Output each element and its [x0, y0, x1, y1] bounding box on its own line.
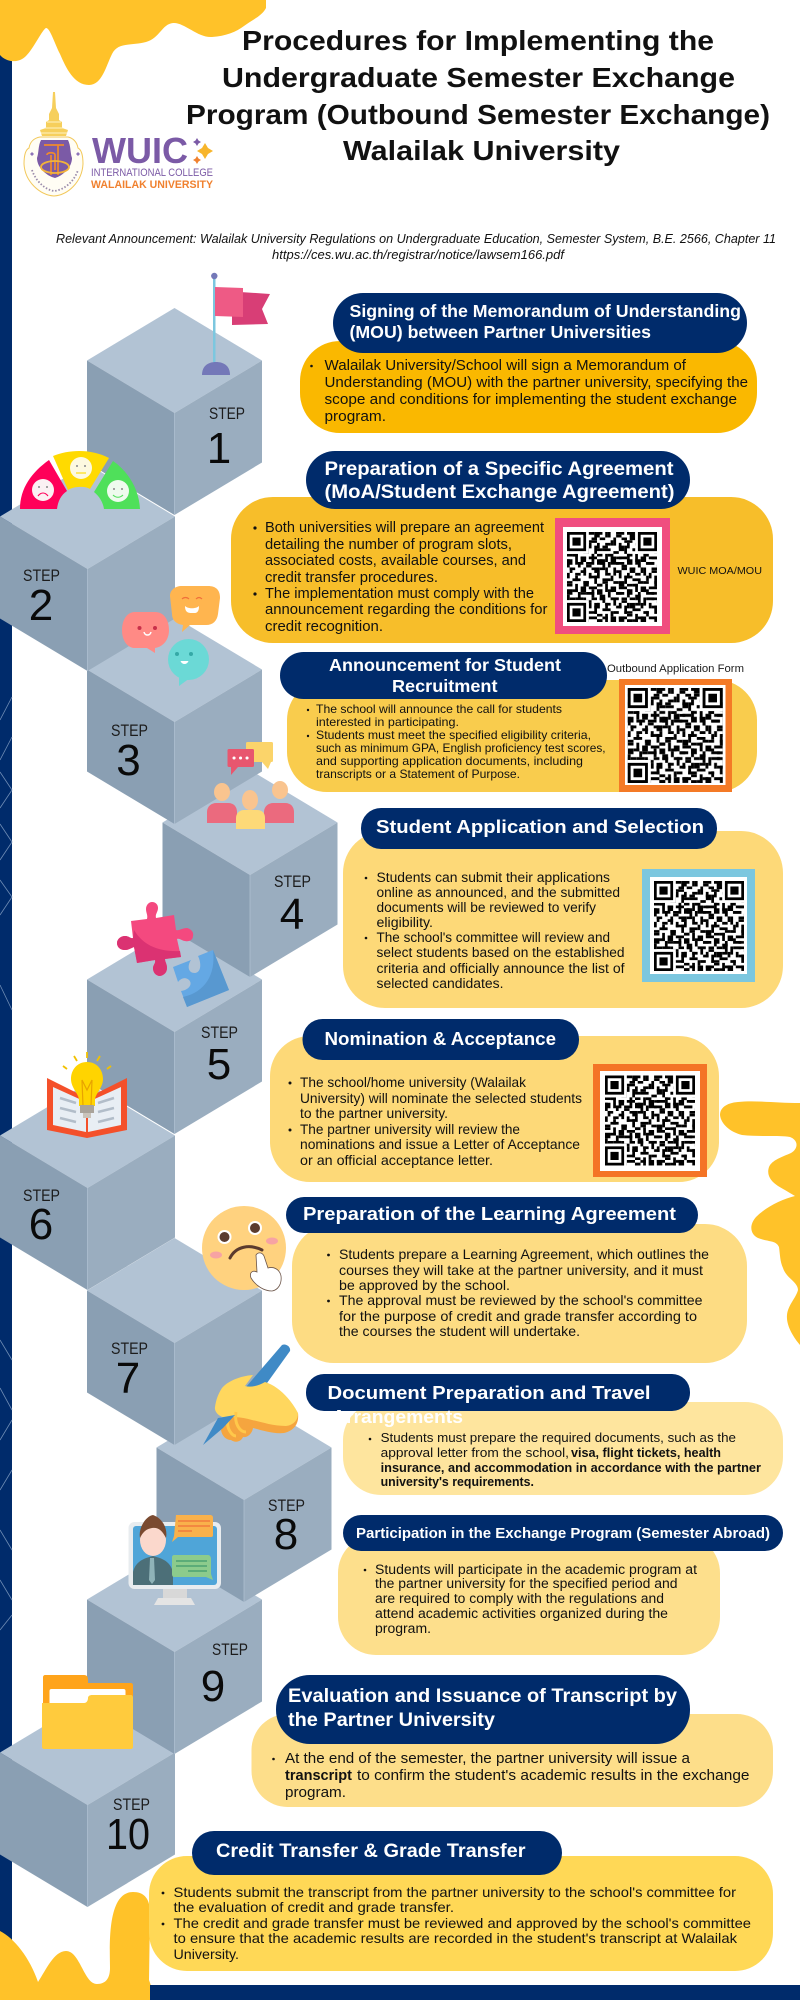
body text: [369, 1430, 761, 1489]
bottom navy bar: [150, 1985, 800, 2000]
icon: satisfaction gauge faces: [20, 451, 140, 509]
step 3 cube: 3: [116, 736, 141, 785]
step 10 cube: 10: [106, 1810, 150, 1859]
body text: attend academic activities organized during the: [375, 1606, 668, 1621]
step 8 cube: STEP: [268, 1497, 305, 1515]
body text: Students must meet the specified eligibility criteria,: [316, 728, 591, 742]
step 3 cube: STEP: [111, 722, 148, 740]
panel: step 4 student application and selection: [343, 808, 783, 1008]
decorative blob: right side: [720, 1101, 800, 1345]
panel: step 6 learning agreement: [286, 1197, 747, 1363]
relevant announcement: [56, 232, 776, 262]
QR caption: Outbound Application Form: [607, 663, 744, 675]
decorative blob: bottom left: [0, 1892, 156, 2000]
logo: WUIC International College, Walailak University: WALAILAK UNIVERSITY: [91, 179, 214, 191]
heading: Student Application and Selection: [376, 816, 704, 837]
body text: The approval must be reviewed by the school's committee: [339, 1292, 703, 1308]
step 1 cube: 1: [207, 424, 231, 473]
icon: logo stars: [193, 138, 213, 164]
step 9 cube: [87, 1547, 262, 1754]
heading: (MOU) between Partner Universities: [350, 322, 651, 342]
body text: [310, 358, 748, 425]
body text: Students must prepare the required documents, such as the: [381, 1430, 736, 1445]
heading: Nomination & Acceptance: [324, 1029, 556, 1049]
heading: the Partner University: [288, 1710, 495, 1731]
step 3 cube: [87, 617, 262, 824]
panel background: [252, 1714, 773, 1807]
step 10 cube: STEP: [113, 1796, 150, 1814]
body text: selected candidates.: [376, 976, 504, 991]
step 4 cube: STEP: [274, 873, 311, 891]
relevant announcement: https://ces.wu.ac.th/registrar/notice/lawsem166.pdf: [272, 248, 566, 262]
panel background: [287, 680, 757, 792]
step 10 cube: [0, 1700, 175, 1907]
heading: Signing of the Memorandum of Understanding: [350, 301, 741, 321]
body text: Students submit the transcript from the partner university to the school's committee for: [174, 1884, 736, 1900]
heading: [333, 293, 747, 353]
logo: WUIC International College, Walailak University: INTERNATIONAL COLLEGE: [91, 167, 213, 179]
icon: puzzle pieces: [117, 902, 229, 1007]
heading: [306, 451, 690, 509]
step 7 cube: 7: [116, 1354, 140, 1403]
step 7 cube: [87, 1238, 262, 1445]
body text: transcripts or a Statement of Purpose.: [316, 767, 520, 781]
left navy strip: [0, 50, 12, 2000]
body text: courses they will take at the partner university, and it must: [339, 1262, 703, 1278]
heading: Document Preparation and Travel: [328, 1382, 650, 1403]
step 9 cube: STEP: [212, 1641, 248, 1659]
heading: [361, 808, 717, 849]
body text: eligibility.: [376, 915, 433, 930]
icon: university crest: [24, 92, 83, 196]
heading: [306, 1374, 690, 1427]
panel: step 3 announcement for student recruitment: [280, 652, 757, 792]
body text: University.: [174, 1946, 239, 1962]
heading: Participation in the Exchange Program (Semester Abroad): [356, 1526, 770, 1542]
decorative blob: top left: [0, 0, 266, 85]
body text: insurance, and accommodation in accordance with the partner: [381, 1460, 761, 1475]
body text: university's requirements.: [381, 1474, 534, 1489]
step 6 cube: [0, 1083, 175, 1290]
icon: folder: [42, 1675, 133, 1749]
body text: Understanding (MOU) with the partner university, specifying the: [324, 375, 748, 391]
body text: approval letter from the school,: [381, 1445, 569, 1460]
step 8 cube: [156, 1395, 332, 1602]
heading: Preparation of a Specific Agreement: [324, 458, 674, 480]
title: [186, 25, 770, 166]
QR code: application: [642, 869, 755, 982]
panel background: [292, 1224, 747, 1363]
heading: Credit Transfer & Grade Transfer: [216, 1841, 526, 1862]
body text: program.: [375, 1621, 431, 1636]
heading: [302, 1019, 579, 1060]
heading: [343, 1515, 783, 1551]
body text: Students will participate in the academic program at: [375, 1562, 697, 1577]
icon: person on computer screen: [128, 1515, 221, 1605]
body text: be approved by the school.: [339, 1277, 510, 1293]
body text: The school will announce the call for students: [316, 702, 562, 716]
panel: step 8 participation in the exchange program: [338, 1515, 783, 1655]
body text: visa, flight tickets, health: [571, 1445, 721, 1460]
panel: step 10 credit transfer and grade transfer: [149, 1831, 773, 1971]
step 7 cube: STEP: [111, 1340, 148, 1358]
body text: nominations and issue a Letter of Acceptance: [300, 1136, 580, 1152]
body text: the partner university for the specified period and: [375, 1576, 678, 1591]
body text: The implementation must comply with the: [265, 586, 534, 602]
body text: [327, 1246, 709, 1339]
body text: credit recognition.: [265, 619, 383, 635]
icon: hand writing with pen: [203, 1344, 298, 1445]
body text: At the end of the semester, the partner university will issue a: [285, 1751, 691, 1767]
heading: [276, 1675, 690, 1744]
body text: [365, 870, 625, 991]
body text: announcement regarding the conditions for: [265, 602, 548, 618]
body text: Walailak University/School will sign a Memorandum of: [324, 358, 687, 374]
title: Program (Outbound Semester Exchange): [186, 99, 770, 130]
body text: to ensure that the academic results are recorded in the student's transcript at Walailak: [174, 1930, 738, 1946]
icon: confused face with pointing hand: [202, 1206, 286, 1291]
body text: [288, 1074, 582, 1168]
body text: University) will nominate the selected students: [300, 1090, 582, 1106]
body text: The partner university will review the: [300, 1121, 520, 1137]
heading: Evaluation and Issuance of Transcript by: [288, 1686, 677, 1707]
QR code: nomination: [593, 1064, 707, 1177]
body text: online as announced, and the submitted: [376, 885, 620, 900]
panel background: [343, 831, 783, 1008]
QR code: outbound application form: [619, 679, 732, 792]
panel background: [338, 1535, 720, 1655]
panel background: [343, 1402, 783, 1495]
heading: (MoA/Student Exchange Agreement): [324, 481, 674, 503]
body text: The school/home university (Walailak: [300, 1074, 527, 1090]
body text: to confirm the student's academic results in the exchange: [357, 1768, 750, 1784]
step 1 cube: [87, 308, 262, 515]
heading: Announcement for Student: [329, 655, 561, 675]
body text: to the partner university.: [300, 1105, 448, 1121]
body text: such as minimum GPA, English proficiency test scores,: [316, 741, 606, 755]
step 5 cube: 5: [207, 1040, 231, 1089]
QR caption: WUIC MOA/MOU: [678, 565, 762, 577]
QR code: WUIC MOA/MOU: [555, 518, 670, 634]
panel: step 9 evaluation and issuance of transcript: [252, 1675, 773, 1807]
staircase of step cubes: [0, 308, 338, 1907]
body text: program.: [324, 409, 386, 425]
icon: open book with light bulb: [47, 1052, 127, 1138]
step 1 cube: STEP: [209, 405, 245, 423]
body text: Students prepare a Learning Agreement, which outlines the: [339, 1246, 709, 1262]
body text: transcript: [285, 1768, 352, 1784]
icon: group of people with chat: [207, 742, 294, 829]
step 8 cube: 8: [274, 1510, 298, 1559]
icon: speech bubbles with faces: [122, 586, 220, 686]
step 6 cube: 6: [29, 1200, 53, 1249]
title: Procedures for Implementing the: [242, 25, 714, 56]
body text: Students can submit their applications: [376, 870, 610, 885]
relevant announcement: Relevant Announcement: Walailak University Regulations on Undergraduate Education, Semester System, B.E. 2566, Chapter 11: [56, 232, 776, 246]
body text: criteria and officially announce the list of: [376, 961, 625, 976]
body text: The credit and grade transfer must be reviewed and approved by the school's committee: [174, 1915, 751, 1931]
body text: [162, 1884, 751, 1962]
panel background: [149, 1856, 773, 1971]
heading: Recruitment: [392, 676, 498, 696]
body text: are required to comply with the regulations and: [375, 1591, 664, 1606]
body text: The school's committee will review and: [376, 930, 610, 945]
body text: the evaluation of credit and grade transfer.: [174, 1899, 454, 1915]
body text: program.: [285, 1785, 346, 1801]
step 2 cube: 2: [29, 581, 53, 630]
body text: detailing the number of program slots,: [265, 537, 512, 553]
panel background: [231, 497, 773, 643]
logo: WUIC International College, Walailak University: [24, 92, 214, 196]
panel background: [270, 1036, 719, 1182]
panel: step 1 signing of the MOU: [300, 293, 757, 433]
body text: [272, 1751, 750, 1801]
icon: flag: [202, 273, 270, 375]
title: Undergraduate Semester Exchange: [222, 62, 735, 93]
panel: step 5 nomination and acceptance: [270, 1019, 719, 1182]
body text: credit transfer procedures.: [265, 570, 438, 586]
body text: interested in participating.: [316, 715, 459, 729]
panel: step 7 document preparation and travel arrangements: [306, 1374, 783, 1495]
logo wordmark: WUIC: [92, 130, 188, 171]
step 6 cube: STEP: [23, 1187, 60, 1205]
body text: [253, 520, 548, 635]
step 2 cube: [0, 464, 175, 671]
body text: or an official acceptance letter.: [300, 1152, 493, 1168]
step 9 cube: 9: [201, 1662, 225, 1711]
heading: Preparation of the Learning Agreement: [303, 1204, 676, 1224]
step 5 cube: STEP: [201, 1024, 238, 1042]
body text: associated costs, available courses, and: [265, 553, 526, 569]
panel background: [300, 341, 757, 433]
body text: [364, 1562, 697, 1636]
heading: [280, 652, 607, 699]
body text: the courses the student will undertake.: [339, 1323, 580, 1339]
step 4 cube: 4: [280, 890, 304, 939]
body text: [307, 702, 606, 781]
step 4 cube: [162, 770, 338, 977]
panel: step 2 specific agreement: [231, 451, 773, 643]
body text: for the purpose of credit and grade transfer according to: [339, 1308, 697, 1324]
body text: documents will be reviewed to verify: [376, 900, 596, 915]
heading: Arrangements: [332, 1406, 463, 1427]
step 5 cube: [87, 927, 262, 1134]
heading: [192, 1831, 562, 1875]
body text: Both universities will prepare an agreement: [265, 520, 544, 536]
body text: and supporting application documents, including: [316, 754, 583, 768]
heading: [286, 1197, 698, 1233]
body text: select students based on the established: [376, 945, 624, 960]
title: Walailak University: [343, 135, 621, 166]
body text: scope and conditions for implementing the student exchange: [324, 392, 737, 408]
step 2 cube: STEP: [23, 567, 60, 585]
